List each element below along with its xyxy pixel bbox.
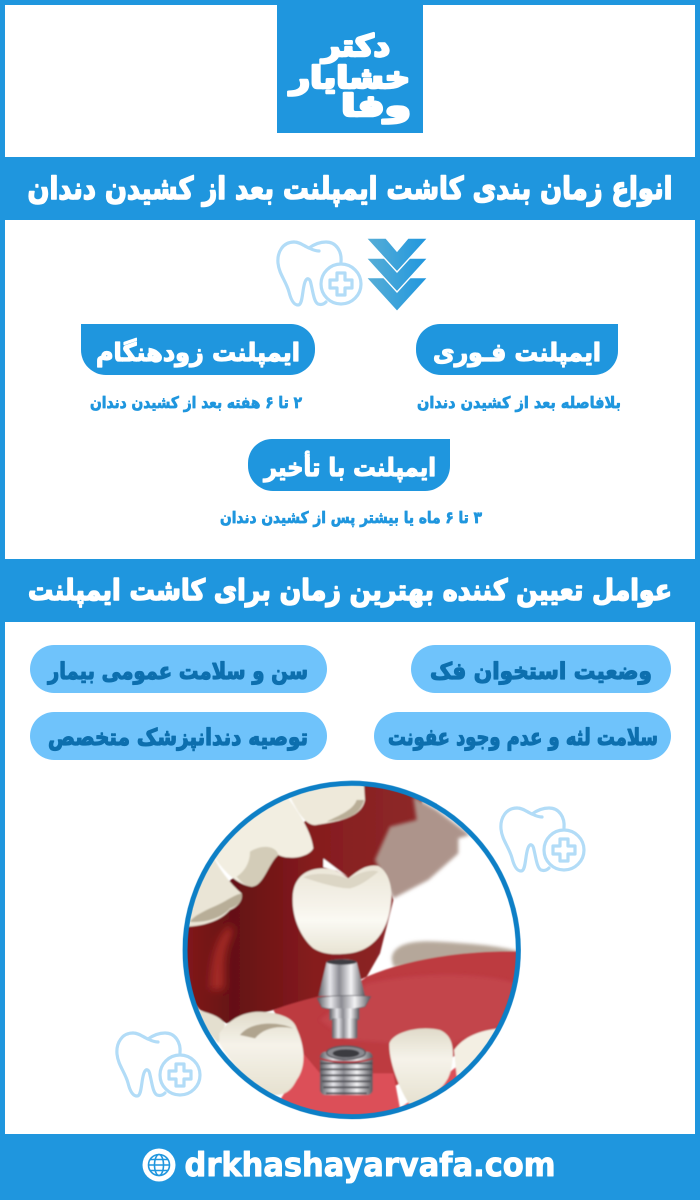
front gum bbox=[280, 1054, 458, 1114]
caption: immediate implant: بلافاصله بعد از کشیدن دندان bbox=[417, 393, 621, 412]
icon: tooth with plus, right bbox=[501, 808, 584, 871]
pill: early implant: ایمپلنت زودهنگام bbox=[96, 338, 300, 368]
factor pill: specialist recommendation bbox=[30, 712, 327, 760]
pill: delayed implant: ایمپلنت با تأخیر bbox=[262, 451, 436, 483]
mouth interior bbox=[180, 780, 423, 1023]
logo text: دکتر bbox=[320, 29, 390, 64]
factor pill: age and general health: سن و سلامت عمومی بیمار bbox=[47, 659, 308, 685]
icon: tooth with plus, top bbox=[278, 242, 361, 305]
lower left teeth bbox=[193, 1010, 225, 1043]
abutment bbox=[318, 959, 365, 996]
tongue gum bbox=[273, 951, 527, 1087]
heading bar: deciding factors bbox=[0, 559, 700, 622]
icon: triple chevron arrow bbox=[366, 238, 428, 312]
far lower teeth bbox=[392, 941, 520, 967]
pill: immediate implant: ایمپلنت فـوری bbox=[433, 338, 601, 368]
caption: delayed implant: ۳ تا ۶ ماه یا بیشتر پس از کشیدن دندان bbox=[220, 508, 482, 528]
factor pill: jaw bone condition bbox=[411, 645, 671, 693]
logo text: وفا bbox=[341, 89, 411, 124]
factor pill: jaw bone condition: وضعیت استخوان فک bbox=[430, 659, 652, 685]
implant screw bbox=[320, 1046, 373, 1095]
pill: delayed implant bbox=[248, 439, 450, 491]
icon: globe bbox=[142, 1148, 176, 1182]
caption: early implant: ۲ تا ۶ هفته بعد از کشیدن دندان bbox=[90, 393, 302, 412]
footer bar bbox=[0, 1134, 700, 1200]
logo text bbox=[288, 29, 411, 124]
pill: early implant bbox=[81, 324, 315, 375]
website address: drkhashayarvafa.com bbox=[184, 1145, 556, 1184]
icon: tooth with plus, lower left bbox=[117, 1033, 200, 1096]
blurred upper far teeth bbox=[375, 797, 470, 898]
factor pill: specialist recommendation: توصیه دندانپزشک متخصص bbox=[48, 725, 308, 751]
logo text: خشایار bbox=[288, 61, 410, 96]
ceramic crown bbox=[293, 865, 391, 954]
dental implant illustration bbox=[173, 773, 527, 1123]
upper teeth bbox=[290, 786, 366, 826]
logo block bbox=[277, 5, 423, 133]
lower right teeth bbox=[389, 1028, 453, 1105]
heading bar: implant timing types bbox=[0, 157, 700, 220]
pill: immediate implant bbox=[416, 324, 618, 375]
factor pill: gum health and no infection bbox=[374, 712, 671, 760]
factor pill: age and general health bbox=[30, 645, 327, 693]
circle border bbox=[185, 783, 518, 1117]
